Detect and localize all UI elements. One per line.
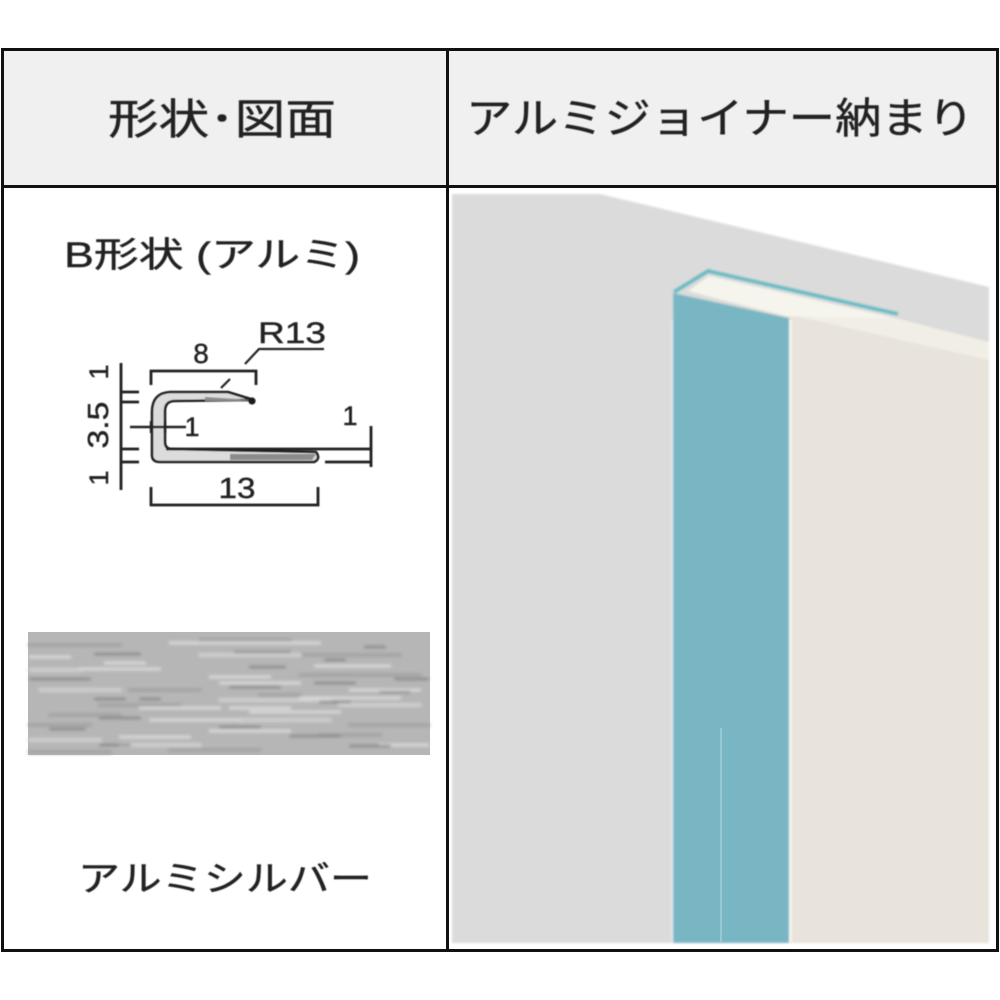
aluminium profile outline [152,392,318,462]
technical drawing: B profile cross-section [83,317,372,505]
dimension labels: R13 [258,317,326,350]
joiner highlight line [720,728,722,943]
leader line: R13 [221,349,324,388]
dimension labels: 1 [342,401,358,431]
panel top edge highlight [788,314,989,360]
heading: aluminium joiner fitting: アルミジョイナー納まり [466,95,974,142]
illustration: joiner installed between wall panels [452,194,989,943]
dimension labels: 13 [218,473,256,505]
dimension labels: 1 [84,470,114,486]
teal joiner face [673,293,789,943]
subheading: B shape aluminium: B形状 (アルミ) [64,236,360,275]
dimension bracket: bottom width 13 [151,487,318,505]
white gap beside joiner [790,320,792,943]
dimension: inner thickness 1 [130,421,186,433]
dimension labels: 1 [84,364,114,380]
beige panel [700,279,989,943]
header: right column background [449,51,996,186]
dimension labels [83,317,358,505]
header: left column background [3,51,446,186]
material swatch: brushed aluminium [28,632,430,755]
profile tip [248,397,256,405]
dimension labels: 1 [184,412,200,442]
joiner top lip [674,271,898,314]
white gap inside joiner [688,276,895,318]
dimension bracket: top width 8 [151,371,256,385]
dimension lines: left vertical scale [121,363,139,490]
dimension labels: 8 [193,338,209,369]
swatch label: aluminium silver: アルミシルバー [78,860,372,899]
profile shading near tips [205,397,316,460]
dimension: right thickness 1 [166,426,372,467]
dimension labels: 3.5 [83,402,115,448]
heading: shape and drawing: 形状･図面 [108,96,336,143]
grey wall [452,194,989,943]
